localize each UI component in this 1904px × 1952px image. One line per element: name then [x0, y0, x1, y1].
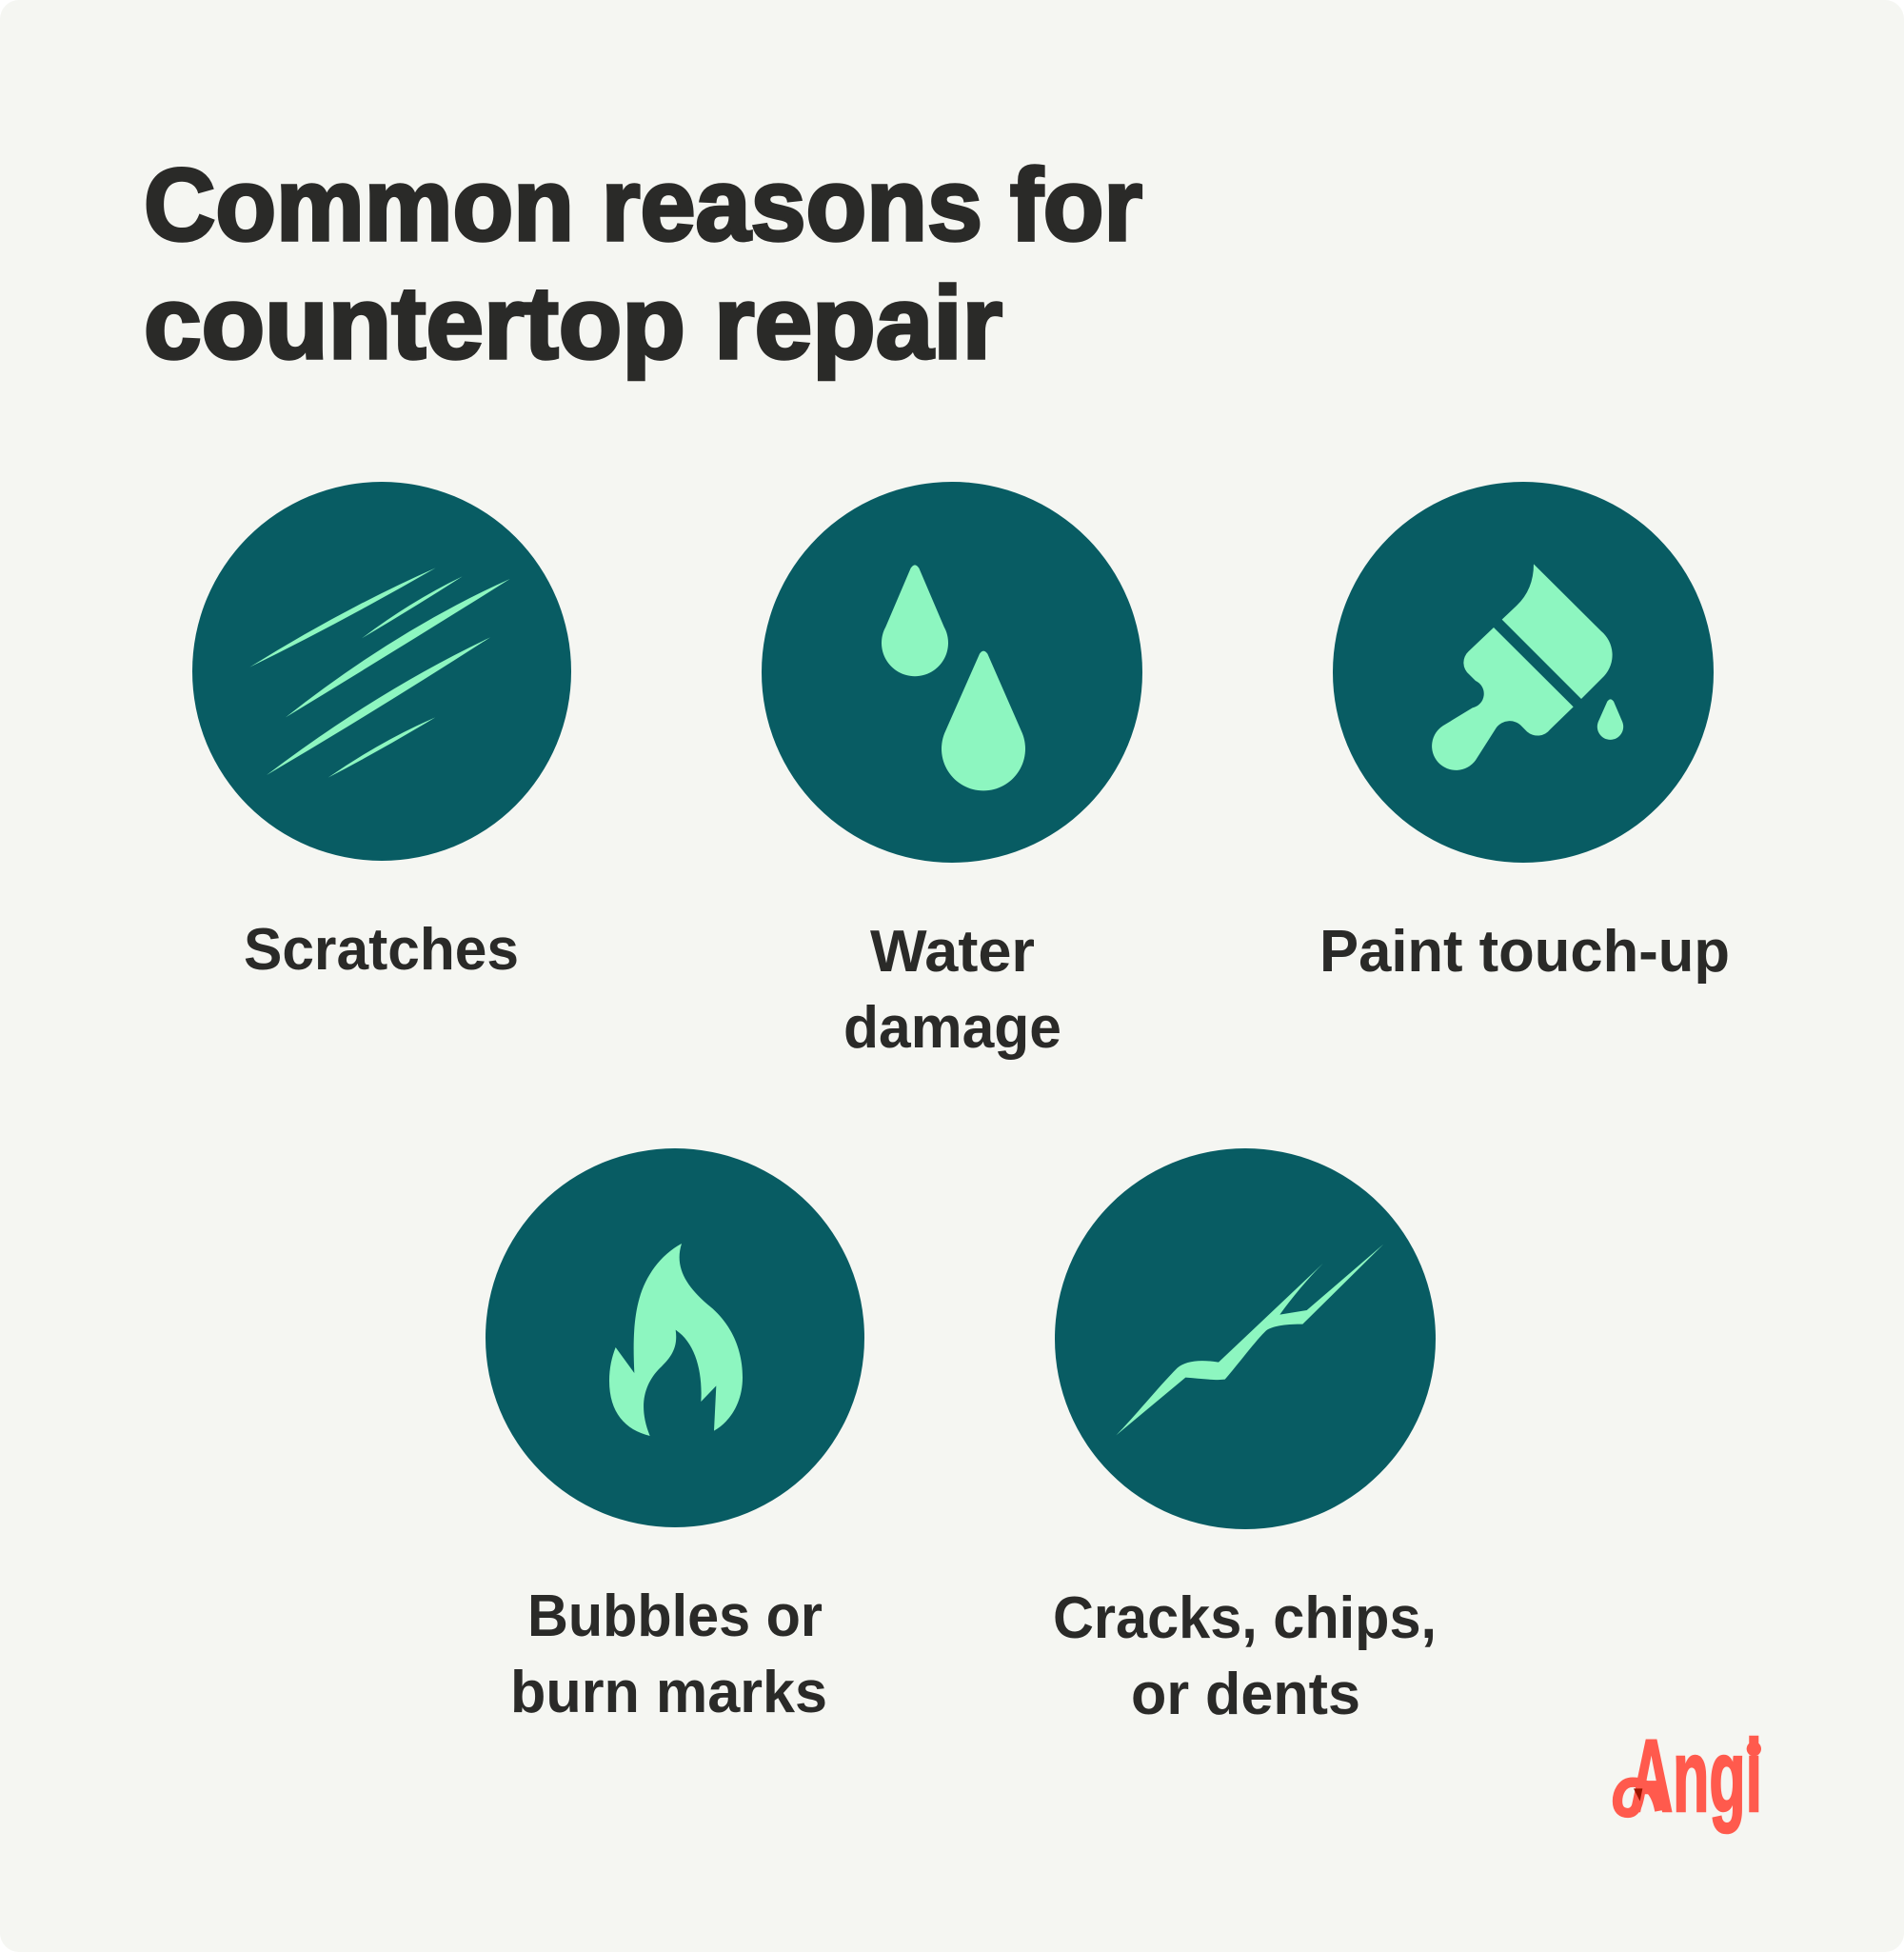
label: cracks, chips, or dents [1053, 1585, 1437, 1727]
circle: water damage [762, 482, 1142, 863]
title: Common reasons for [144, 147, 1142, 262]
logo: Angi: Angi [1630, 1718, 1762, 1833]
circle: paint touch-up [1333, 482, 1714, 863]
circle: scratches [192, 482, 571, 861]
label: water damage: damage [843, 995, 1061, 1061]
item: paint touch-up [1319, 482, 1730, 985]
label: cracks, chips, or dents: Cracks, chips, [1053, 1585, 1437, 1651]
label: cracks, chips, or dents: or dents [1131, 1662, 1360, 1727]
label: water damage [843, 919, 1061, 1061]
icon: crack [1116, 1245, 1383, 1435]
circle: bubbles or burn marks [486, 1148, 864, 1527]
item: scratches [192, 482, 571, 983]
circle: cracks, chips, or dents [1055, 1148, 1436, 1529]
icon: flame [609, 1244, 743, 1436]
logo: Angi [1617, 1718, 1762, 1833]
label: paint touch-up: Paint touch-up [1319, 919, 1730, 985]
item: bubbles or burn marks [486, 1148, 864, 1725]
title: countertop repair [144, 265, 1002, 380]
label: scratches: Scratches [244, 917, 519, 983]
icon: water drops [882, 565, 1025, 790]
title [144, 147, 1142, 380]
label: bubbles or burn marks: Bubbles or [527, 1584, 823, 1649]
item: water damage [762, 482, 1142, 1061]
label: bubbles or burn marks [510, 1584, 827, 1725]
label: bubbles or burn marks: burn marks [510, 1660, 827, 1725]
icon: scratches [249, 568, 510, 778]
icon: paint brush [1432, 564, 1623, 770]
label: water damage: Water [870, 919, 1035, 985]
item: cracks, chips, or dents [1053, 1148, 1437, 1727]
